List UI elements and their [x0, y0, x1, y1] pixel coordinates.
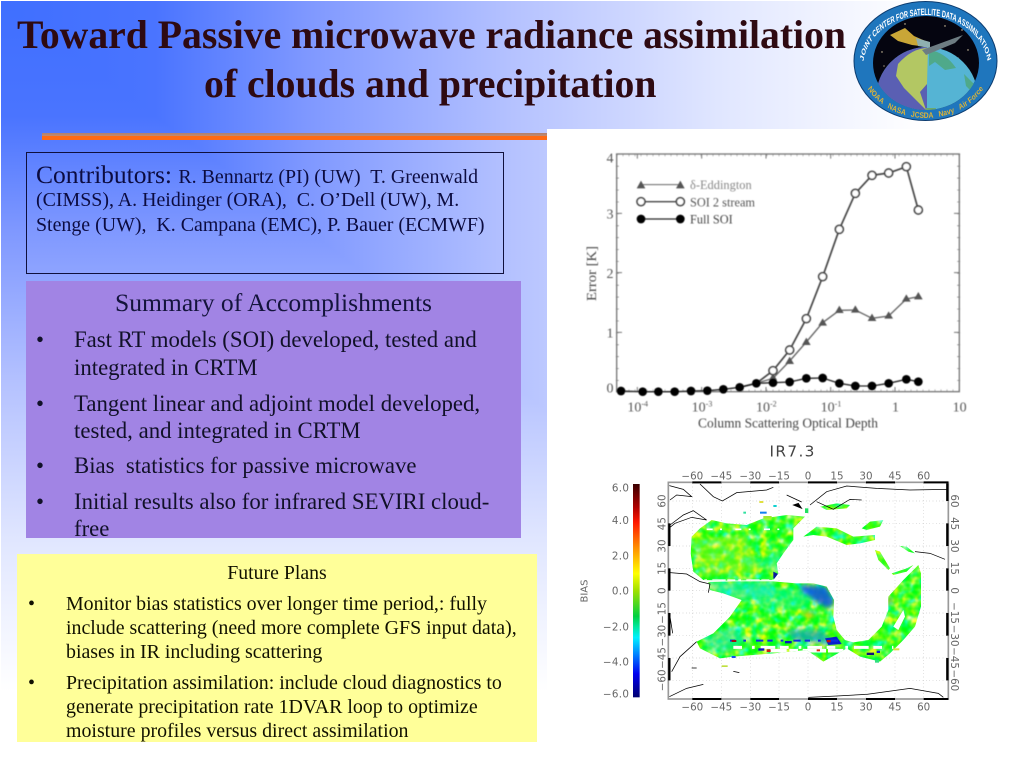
list: accomplishments: • [36, 391, 44, 416]
heading: future plans: Future Plans [227, 562, 327, 584]
chart legend: Full SOI [690, 213, 733, 227]
series: SOI 2 stream [740, 163, 922, 387]
map grid [669, 483, 947, 698]
map axis labels: −60 [681, 471, 703, 483]
y axis labels [606, 151, 614, 396]
y axis labels: 1 [606, 327, 614, 342]
map axis labels: 30 [657, 539, 669, 553]
panel: contributors: Contributors: R. Bennartz (PI) (UW) T. Greenwald [36, 160, 478, 189]
title: Toward Passive microwave radiance assimilation [17, 13, 846, 57]
map axis labels: −45 [710, 471, 732, 483]
map axis labels: 15 [948, 562, 960, 575]
map axis labels: 15 [830, 471, 844, 483]
seal lettering: bottom: NOAA NASA JCSDA Navy Air Force [868, 86, 983, 118]
panel: contributors: Stenge (UW), K. Campana (EMC), P. Bauer (ECMWF) [36, 214, 485, 236]
map frame [668, 482, 948, 699]
panel: contributors [26, 152, 504, 274]
colour scale: −4.0 [603, 657, 629, 669]
list: accomplishments: tested, and integrated in CRTM [74, 418, 361, 443]
colour scale: 0.0 [612, 586, 629, 598]
map axis labels: −30 [739, 471, 761, 483]
panel: contributors: (CIMSS), A. Heidinger (ORA), C. O’Dell (UW), M. [36, 189, 459, 211]
y axis labels: 4 [606, 151, 614, 166]
chart axes [617, 154, 959, 392]
list: future plans: biases in IR including scattering [66, 641, 322, 663]
x axis labels: -4 [641, 400, 648, 409]
list: accomplishments: • [36, 327, 44, 352]
coastlines [669, 484, 947, 697]
list: future plans: • [28, 593, 35, 615]
map axis labels: 45 [888, 701, 902, 713]
map axis labels: 0 [805, 471, 811, 483]
title: of clouds and precipitation [204, 62, 656, 106]
list: accomplishments: free [74, 516, 109, 541]
chart legend [637, 178, 755, 227]
line chart: error vs optical depth: Error [K] [584, 246, 599, 301]
list: accomplishments: Bias statistics for passive microwave [74, 453, 417, 478]
map axis labels: −60 [681, 701, 703, 713]
map axis labels: −15 [657, 602, 669, 624]
list: future plans: Monitor bias statistics over longer time period,: fully [66, 593, 487, 615]
map: IR7.3 bias [579, 443, 960, 713]
map axis labels: −45 [948, 647, 960, 669]
x axis labels: -1 [835, 400, 841, 409]
scattered bias pixels [722, 501, 899, 667]
map axis labels: 60 [917, 701, 930, 713]
panel: summary of accomplishments [26, 281, 521, 538]
x axis labels: 1 [892, 400, 899, 415]
seal lettering: top: JOINT CENTER FOR SATELLITE DATA ASSIMILATION [860, 8, 992, 61]
map axis labels: −45 [657, 647, 669, 669]
map axis labels: −30 [948, 625, 960, 647]
map axis labels: −45 [710, 701, 732, 713]
map axis labels: −15 [948, 602, 960, 624]
list: future plans: moisture profiles versus direct assimilation [66, 720, 408, 742]
x axis labels: -3 [706, 400, 712, 409]
map axis labels: 30 [948, 539, 960, 553]
list: future plans: include scattering (need more complete GFS input data), [66, 617, 517, 639]
map axis labels: −15 [768, 471, 790, 483]
list: accomplishments: • [36, 489, 44, 514]
list: future plans [28, 593, 517, 742]
x axis labels: 10 [692, 400, 706, 415]
list: accomplishments: Initial results also for infrared SEVIRI cloud- [74, 489, 489, 514]
series: Full SOI [617, 374, 923, 396]
colour scale: −6.0 [603, 688, 629, 700]
heading: summary: Summary of Accomplishments [115, 288, 432, 317]
list: accomplishments: Tangent linear and adjoint model developed, [74, 391, 480, 416]
map axis labels: 45 [888, 471, 902, 483]
logo: JCSDA seal [854, 1, 998, 121]
map axis labels: −15 [768, 701, 790, 713]
map axis labels: 30 [859, 471, 873, 483]
x axis labels: 10 [821, 400, 835, 415]
map axis labels: −30 [657, 625, 669, 647]
map axis labels: 15 [657, 562, 669, 575]
map axis labels: −30 [739, 701, 761, 713]
list: future plans: • [28, 672, 35, 694]
map axis labels: 30 [859, 701, 873, 713]
map axis labels: −60 [948, 669, 960, 691]
map axis labels: −60 [657, 669, 669, 691]
y axis labels: 3 [606, 207, 614, 222]
map axis labels: 15 [830, 701, 844, 713]
map axis labels: 0 [657, 587, 669, 594]
colour scale: BIAS [579, 580, 590, 602]
panel: white figure backing [547, 129, 982, 729]
colour scale: −2.0 [603, 621, 629, 633]
map axis labels [657, 471, 960, 713]
y axis labels: 2 [606, 267, 614, 282]
colour scale: 2.0 [612, 550, 629, 562]
satellite [890, 28, 963, 55]
colour scale: 6.0 [612, 482, 629, 494]
line chart: error vs optical depth [584, 151, 967, 432]
colour scale [579, 482, 640, 700]
chart legend: SOI 2 stream [690, 195, 755, 209]
map title: IR7.3 [770, 443, 816, 461]
chart legend: δ-Eddington [690, 178, 752, 192]
list: accomplishments [36, 327, 489, 541]
x axis labels: -2 [770, 400, 777, 409]
map axis labels: 45 [657, 517, 669, 530]
map axis labels: 60 [948, 494, 960, 508]
list: accomplishments: integrated in CRTM [74, 355, 258, 380]
x axis labels: 10 [953, 400, 967, 415]
map axis labels: 45 [948, 517, 960, 530]
map axis labels: 0 [805, 701, 811, 713]
list: accomplishments: Fast RT models (SOI) developed, tested and [74, 327, 477, 352]
title [17, 13, 846, 106]
map axis labels: 60 [657, 494, 669, 508]
x axis labels [627, 400, 967, 415]
title underline [42, 133, 547, 140]
map axis labels: 0 [948, 587, 960, 594]
series: delta-Eddington [756, 292, 923, 383]
panel: future plans [17, 554, 537, 742]
map axis labels: 60 [917, 471, 930, 483]
x axis labels: 10 [756, 400, 770, 415]
axis titles: Column Scattering Optical Depth [698, 416, 878, 431]
list: future plans: generate precipitation rate 1DVAR loop to optimize [66, 696, 478, 718]
bias field [687, 500, 927, 667]
list: accomplishments: • [36, 453, 44, 478]
y axis labels: 0 [606, 381, 614, 396]
list: future plans: Precipitation assimilation: include cloud diagnostics to [66, 672, 502, 694]
x axis labels: 10 [627, 400, 641, 415]
colour scale: 4.0 [612, 515, 629, 527]
